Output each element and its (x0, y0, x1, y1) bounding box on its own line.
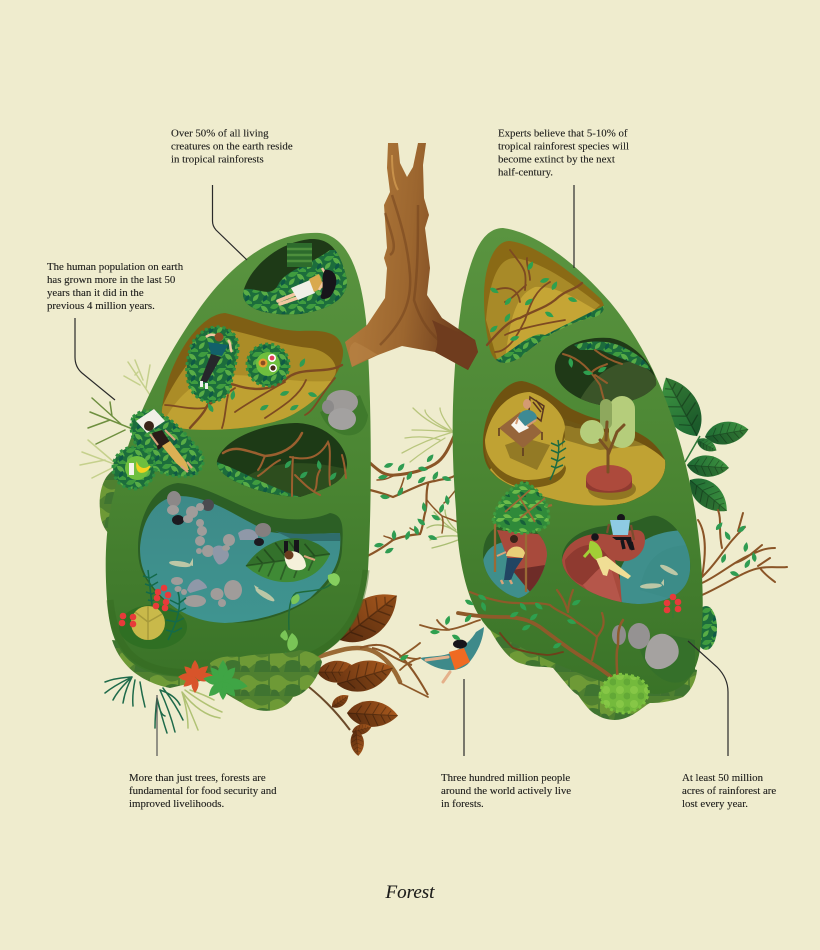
red berries (119, 585, 171, 627)
callout: extinct species: tropical rainforest species will (498, 140, 629, 152)
right foliage behind lung (488, 370, 787, 720)
roots in cave (223, 433, 346, 496)
right edge bush (695, 606, 717, 650)
callout: extinct species: become extinct by the next (498, 154, 615, 166)
callout: extinct species (498, 128, 629, 268)
moss bush left of lung (100, 468, 120, 538)
main branch (458, 590, 623, 683)
pergola posts (493, 505, 552, 592)
big green leaves (651, 370, 750, 520)
floating leaf (243, 533, 333, 588)
left foliage behind lung (80, 360, 150, 538)
brown leaf cluster (317, 581, 408, 756)
lime shirt person (584, 533, 631, 579)
orange shirt torso (449, 648, 470, 670)
branches (487, 250, 582, 352)
branches by hammock (400, 620, 480, 697)
moss behind lung (112, 640, 205, 688)
fish (169, 558, 276, 603)
callout: acres lost: acres of rainforest are (682, 785, 776, 797)
right branch leaves (714, 521, 757, 578)
branch leaves (464, 593, 582, 650)
callout: extinct species: Experts believe that 5-10% of (498, 128, 628, 140)
cave: golden with man and picnic (162, 313, 344, 430)
green ferns (143, 570, 186, 640)
callout: human population: has grown more in the last 50 (47, 274, 176, 286)
lung body (453, 228, 703, 694)
rim shadow (110, 570, 366, 673)
callout: food security: fundamental for food security and (129, 785, 277, 797)
callout: human population: previous 4 million years. (47, 300, 155, 312)
cave: top sleeping woman (243, 239, 347, 314)
pond rocks (167, 491, 271, 607)
callout: 50% of creatures: Over 50% of all living (171, 128, 269, 140)
callout: human population: The human population on earth (47, 261, 184, 273)
root leaves (206, 357, 318, 413)
roots (165, 365, 342, 428)
desk with paper (499, 412, 542, 456)
callout: acres lost: At least 50 million (682, 772, 764, 784)
green spiky plant (203, 660, 249, 700)
blue shirt person (607, 514, 634, 550)
cave: dark with roots (215, 423, 350, 500)
striped cube (287, 243, 312, 267)
man lying (200, 332, 232, 389)
callout: extinct species: half-century. (498, 166, 553, 178)
seated man (516, 399, 537, 426)
pale fern lower (427, 510, 458, 548)
thin stem (300, 680, 350, 730)
leaf bed for man (187, 327, 238, 402)
cave: pool with red steps (562, 514, 692, 610)
callout: human population: years than it did in the (47, 287, 144, 299)
bottom foliage behind left lung (105, 640, 222, 733)
trunk (345, 143, 478, 370)
moss over lung base (206, 650, 322, 711)
hammock (420, 627, 484, 670)
raised platform (485, 431, 566, 488)
woman lying (278, 268, 336, 304)
callout: food security: improved livelihoods. (129, 798, 224, 810)
rocks upper left lung (320, 390, 368, 435)
callout: food security (129, 695, 277, 810)
undergrowth below right lung (488, 626, 697, 720)
fish in pool (640, 563, 679, 589)
callout: acres lost: lost every year. (682, 798, 748, 810)
pergola plant (493, 482, 549, 533)
tree trunk (600, 422, 624, 472)
callout: 50% of creatures (171, 128, 293, 260)
water (140, 496, 340, 623)
callout: three hundred million: Three hundred million people (441, 772, 570, 784)
fern and berry garden (119, 570, 187, 649)
cave: study with tree (483, 381, 665, 506)
small fern (550, 440, 566, 480)
leaf bed (243, 250, 347, 314)
tree planter (580, 396, 636, 500)
seated woman (497, 535, 525, 584)
foreground plants at lung base (178, 650, 322, 711)
callout: three hundred million: in forests. (441, 798, 484, 810)
right lung (453, 228, 703, 694)
big rocks right lung (612, 623, 695, 683)
chair (529, 397, 544, 421)
cave: dark hollow (555, 338, 660, 410)
callout: 50% of creatures: in tropical rainforests (171, 154, 264, 166)
thick branch (318, 648, 400, 682)
cave: top golden with branches (484, 241, 605, 370)
red berries right lung (664, 594, 681, 618)
table shadow (505, 438, 550, 470)
callout: food security: More than just trees, forests are (129, 772, 266, 784)
bright bush (600, 674, 648, 713)
cave: pond (138, 483, 343, 668)
hammock person (399, 613, 484, 697)
vine (262, 573, 340, 668)
branch network (363, 436, 458, 558)
title: Forest (385, 882, 435, 903)
callout: three hundred million (441, 679, 571, 810)
right branches (698, 510, 787, 595)
ferns: pale fronds left of lung (80, 360, 150, 478)
lung body (106, 233, 371, 678)
brown leaves and branch (300, 581, 428, 756)
man on pillow with fruit (113, 409, 203, 489)
branches and bright bush over right lung (458, 590, 648, 713)
callout: acres lost (682, 641, 776, 810)
callout: human population (47, 261, 184, 400)
centre branches and ferns (363, 408, 458, 558)
cave: pergola with seated woman (483, 482, 552, 600)
root fronds (105, 677, 222, 733)
person on leaf (284, 540, 315, 570)
callout: three hundred million: around the world actively live (441, 785, 571, 797)
pale fern upper (402, 408, 453, 462)
left lung (106, 233, 371, 678)
branch leaves (374, 453, 452, 555)
callout: 50% of creatures: creatures on the earth reside (171, 140, 293, 152)
hammock leaves (399, 613, 473, 662)
red spiky plant (178, 660, 215, 693)
tree crowns (609, 396, 635, 448)
fruit bush (113, 447, 155, 489)
picnic (247, 344, 289, 386)
